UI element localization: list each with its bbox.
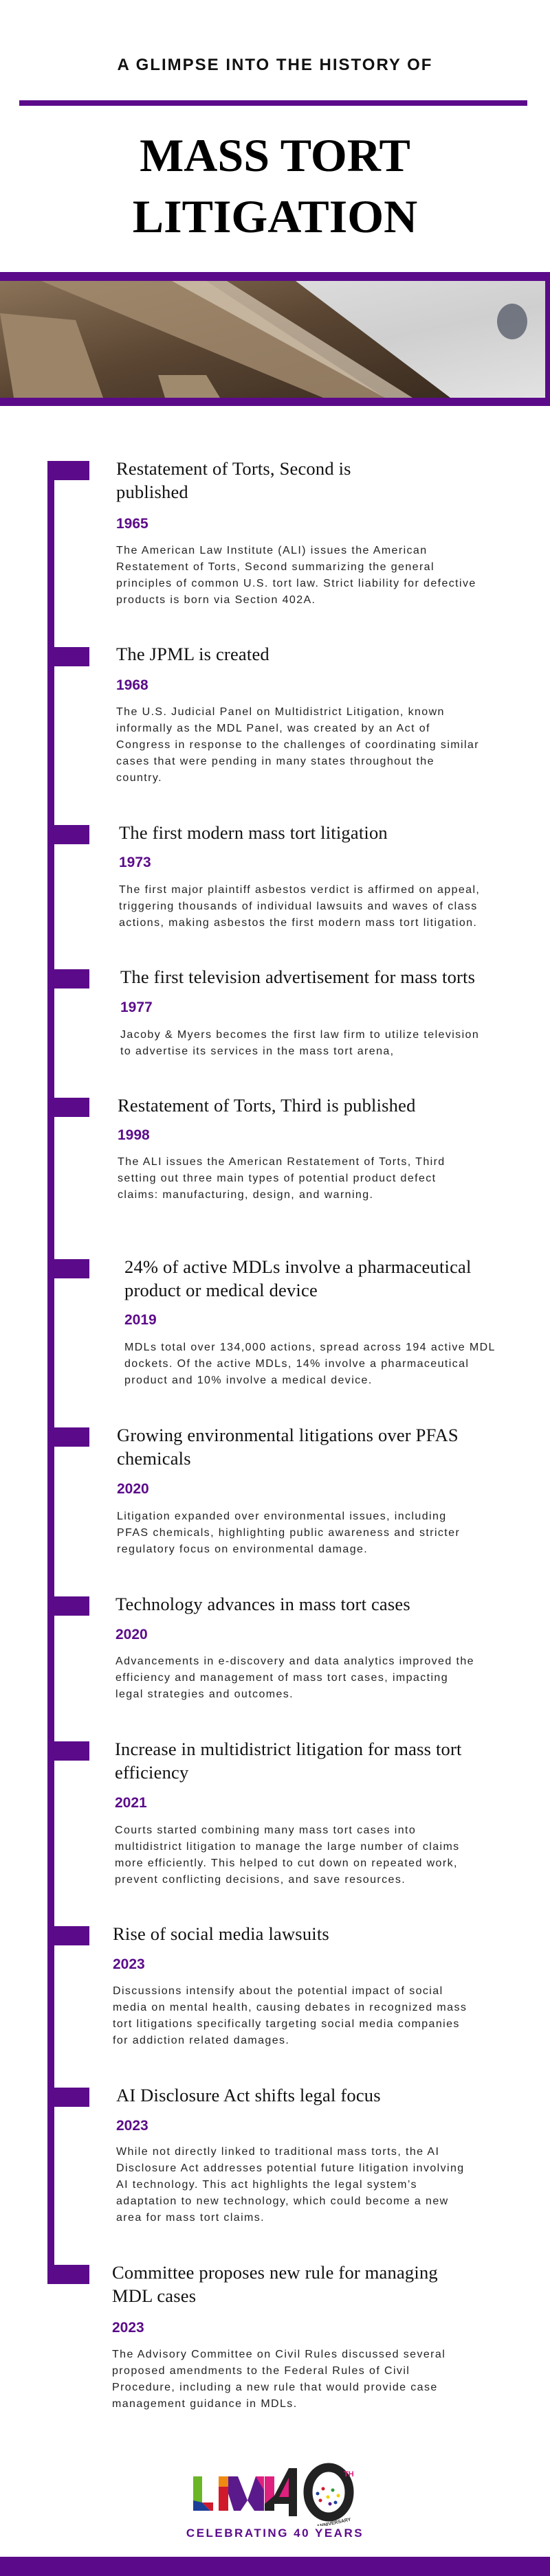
4 <box>274 2468 297 2516</box>
entry 2020 technology: Technology advances in mass tort cases <box>116 1594 410 1614</box>
entry 1973: actions, making asbestos the first modern mass tort litigation. <box>119 917 477 929</box>
TH: TH <box>344 2470 354 2478</box>
hero photo band <box>0 272 550 406</box>
entry 2023 social media: 2023 <box>113 1956 145 1972</box>
entry 1998: 1998 <box>118 1127 150 1143</box>
main title <box>133 129 417 242</box>
entry 1998 <box>54 1095 446 1201</box>
entry 2020 technology: Advancements in e-discovery and data analytics improved the <box>116 1656 474 1667</box>
entry 1973: The first major plaintiff asbestos verdict is affirmed on appeal, <box>119 884 480 896</box>
entry 2023 committee <box>54 2262 446 2410</box>
entry 2020 PFAS: PFAS chemicals, highlighting public awareness and stricter <box>117 1527 460 1539</box>
logo caption: CELEBRATING 40 YEARS <box>186 2527 364 2540</box>
year: 1965 <box>116 516 148 532</box>
entry 2021: Increase in multidistrict litigation for mass tort <box>115 1739 462 1759</box>
entry 1968: country. <box>116 772 162 784</box>
entry 1968 <box>54 644 479 784</box>
main title: LITIGATION <box>133 190 417 242</box>
entry 1998: Restatement of Torts, Third is published <box>118 1095 416 1116</box>
entry 2019: product or medical device <box>124 1280 318 1300</box>
entry 2020 technology: efficiency and management of mass tort cases, impacting <box>116 1672 448 1684</box>
entry 2023 AI: adaptation to new technology, which could become a new <box>116 2195 449 2207</box>
entry 1968: 1968 <box>116 677 148 693</box>
entry 1973: 1973 <box>119 855 151 870</box>
entry 2019 <box>54 1256 496 1386</box>
entry 2020 PFAS: chemicals <box>117 1448 191 1469</box>
entry 2020 PFAS: 2020 <box>117 1481 149 1497</box>
I <box>265 2476 274 2511</box>
entry 1998: setting out three main types of potential product defect <box>118 1173 437 1184</box>
body: Restatement of Torts, Second summarizing the general <box>116 561 434 573</box>
entry 2023 AI: AI technology. This act highlights the legal system’s <box>116 2179 417 2191</box>
heading: published <box>116 482 188 502</box>
M <box>219 2476 228 2511</box>
subtitle: A GLIMPSE INTO THE HISTORY OF <box>118 56 432 74</box>
body: principles of common U.S. tort law. Strict liability for defective <box>116 578 476 589</box>
footer bar <box>0 2557 550 2576</box>
entry 2023 committee: proposed amendments to the Federal Rules of Civil <box>112 2365 410 2377</box>
entry 1977 <box>54 967 479 1057</box>
entry 2021: multidistrict litigation to manage the large number of claims <box>115 1841 460 1853</box>
entry 2023 AI: area for mass tort claims. <box>116 2212 265 2224</box>
entry 2023 social media: tort litigations specifically targeting social media companies <box>113 2018 460 2030</box>
entry 2023 committee: management guidance in MDLs. <box>112 2398 298 2410</box>
0 <box>308 2467 349 2517</box>
entry 2020 PFAS <box>54 1425 460 1555</box>
entry 2019: product and 10% involve a medical device. <box>124 1375 373 1386</box>
logo: LMI 40th anniversary <box>186 2463 364 2540</box>
entry 1977: to advertise its services in the mass tort arena, <box>120 1046 395 1057</box>
entry 1973: triggering thousands of individual lawsuits and waves of class <box>119 901 478 912</box>
heading: Restatement of Torts, Second is <box>116 458 351 479</box>
entry 1968: The JPML is created <box>116 644 270 664</box>
entry 2023 AI <box>54 2085 465 2224</box>
entry 1965 <box>54 458 476 606</box>
entry 1977: The first television advertisement for mass torts <box>120 967 475 987</box>
entry 2023 social media: Rise of social media lawsuits <box>113 1923 329 1944</box>
L <box>193 2476 202 2511</box>
entry 2021 <box>54 1739 462 1886</box>
entry 1973 <box>54 822 480 929</box>
entry 2021: Courts started combining many mass tort cases into <box>115 1824 416 1836</box>
divider line <box>19 100 527 106</box>
entry 1977: Jacoby & Myers becomes the first law firm to utilize television <box>120 1029 479 1041</box>
entry 2023 AI: 2023 <box>116 2118 148 2134</box>
entry 2019: MDLs total over 134,000 actions, spread across 194 active MDL <box>124 1342 496 1353</box>
entry 1977: 1977 <box>120 999 153 1015</box>
entry 1968: The U.S. Judicial Panel on Multidistrict Litigation, known <box>116 706 445 718</box>
entry 2023 social media <box>54 1923 467 2046</box>
entry 1968: informally as the MDL Panel, was created by an Act of <box>116 723 430 734</box>
heading <box>116 458 351 502</box>
entry 2023 committee: The Advisory Committee on Civil Rules discussed several <box>112 2349 446 2360</box>
body: products is born via Section 402A. <box>116 594 316 606</box>
entry 2019: dockets. Of the active MDLs, 14% involve a pharmaceutical <box>124 1358 469 1370</box>
entry 1973: The first modern mass tort litigation <box>119 822 388 843</box>
entry 2023 social media: for addiction related damages. <box>113 2035 289 2046</box>
body <box>116 545 476 606</box>
entry 2020 PFAS: Growing environmental litigations over PFAS <box>117 1425 459 1445</box>
entry 2019: 2019 <box>124 1312 157 1328</box>
entry 2023 social media: media on mental health, causing debates in recognized mass <box>113 2002 467 2013</box>
entry 2020 PFAS: Litigation expanded over environmental issues, including <box>117 1511 447 1522</box>
entry 2023 social media: Discussions intensify about the potential impact of social <box>113 1985 443 1997</box>
main title: MASS TORT <box>140 129 410 181</box>
entry 2021: prevent conflicting decisions, and save resources. <box>115 1874 406 1886</box>
entry 2023 AI: Disclosure Act addresses potential future litigation involving <box>116 2162 465 2174</box>
entry 2023 committee: Procedure, including a new rule that would provide case <box>112 2382 438 2393</box>
entry 2023 committee: 2023 <box>112 2320 144 2336</box>
timeline vertical bar <box>47 461 54 2284</box>
entry 2023 committee: Committee proposes new rule for managing <box>112 2262 438 2283</box>
entry 2021: more efficiently. This helped to cut down on repeated work, <box>115 1857 458 1869</box>
entry 2023 AI: While not directly linked to traditional mass torts, the AI <box>116 2146 439 2158</box>
body: The American Law Institute (ALI) issues the American <box>116 545 428 556</box>
entry 2019: 24% of active MDLs involve a pharmaceutical <box>124 1256 472 1277</box>
entry 1998: claims: manufacturing, design, and warning. <box>118 1189 373 1201</box>
entry 2021: efficiency <box>115 1762 188 1783</box>
entry 2020 technology: 2020 <box>116 1627 148 1642</box>
entry 2020 technology <box>54 1594 474 1700</box>
entry 1998: The ALI issues the American Restatement of Torts, Third <box>118 1156 446 1168</box>
entry 2021: 2021 <box>115 1795 147 1811</box>
entry 2020 PFAS: regulatory focus on environmental damage. <box>117 1544 368 1555</box>
entry 2023 committee: MDL cases <box>112 2285 196 2306</box>
entry 2023 AI: AI Disclosure Act shifts legal focus <box>116 2085 381 2105</box>
entry 1968: cases that were pending in many states throughout the <box>116 756 434 767</box>
entry 1968: Congress in response to the challenges of coordinating similar <box>116 739 479 751</box>
entry 2020 technology: legal strategies and outcomes. <box>116 1688 294 1700</box>
